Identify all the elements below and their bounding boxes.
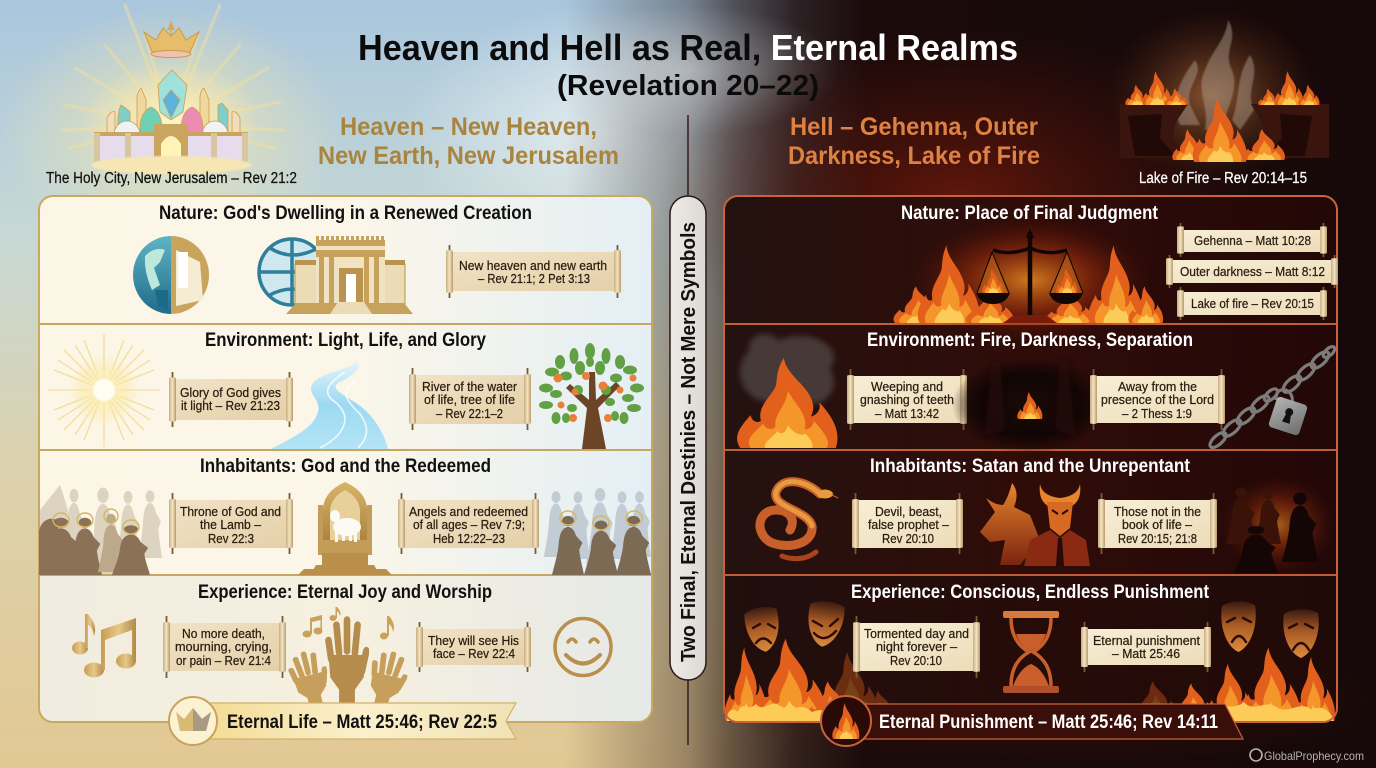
icon: scales and flames [894, 218, 1163, 342]
center pill [670, 196, 706, 680]
icon: unrepentant silhouettes [1220, 476, 1336, 574]
title [358, 27, 1018, 102]
icon: hourglass [1003, 611, 1059, 693]
heading: heaven [318, 113, 619, 170]
icon: globe and door [133, 236, 209, 314]
heading: experience: Experience: Conscious, Endless Punishment [851, 581, 1209, 603]
scroll: outer darkness [1166, 255, 1338, 288]
icon: serpent [760, 482, 838, 559]
scroll: river of the water: River of the water [422, 379, 518, 394]
icon: sun of glory [48, 334, 160, 447]
scroll: angels [398, 493, 539, 554]
heading: experience: Experience: Eternal Joy and Worship [198, 581, 492, 603]
watermark: GlobalProphecy.com [1264, 749, 1364, 763]
scroll: angels: of all ages – Rev 7:9; [413, 517, 525, 532]
subtitle: (Revelation 20–22) [557, 70, 819, 102]
scroll: river of the water: – Rev 22:1–2 [436, 406, 503, 421]
scroll: eternal punishment: Eternal punishment [1093, 633, 1200, 648]
heading: heaven: New Earth, New Jerusalem [318, 142, 619, 170]
panel: hell [724, 196, 1338, 722]
scroll: devil beast [852, 493, 963, 554]
scroll: gehenna [1177, 223, 1327, 257]
scroll: away [1090, 369, 1225, 430]
heading: inhabitants: Inhabitants: God and the Redeemed [200, 455, 491, 477]
scroll: weeping: gnashing of teeth [860, 392, 954, 407]
scroll: angels: Angels and redeemed [409, 504, 528, 519]
icon: broken chain and padlock [1208, 345, 1337, 450]
icon: flame medallion [821, 696, 871, 746]
icon: dark cave with fire [952, 357, 1108, 453]
scroll: those not in the book: Rev 20:15; 21:8 [1118, 531, 1197, 546]
panel: heaven [39, 196, 652, 722]
caption: lake of fire: Lake of Fire – Rev 20:14–15 [1139, 170, 1307, 187]
scroll: away: presence of the Lord [1101, 392, 1214, 407]
heading: hell: Hell – Gehenna, Outer [790, 113, 1038, 141]
scroll: new heaven: New heaven and new earth [459, 258, 607, 273]
scroll: away: – 2 Thess 1:9 [1122, 406, 1192, 421]
scroll: away: Away from the [1118, 379, 1197, 394]
banner: eternal life [169, 697, 516, 745]
scroll: weeping [847, 369, 967, 430]
scroll: those not in the book: book of life – [1122, 517, 1193, 532]
icon: throne and lamb [298, 482, 392, 575]
center pill: Two Final, Eternal Destinies – Not Mere Symbols [677, 222, 700, 662]
scroll: no more death: mourning, crying, [175, 639, 272, 654]
scroll: eternal punishment: – Matt 25:46 [1112, 646, 1180, 661]
scroll: weeping: – Matt 13:42 [875, 406, 939, 421]
title: Heaven and Hell as Real, Eternal Realms [358, 27, 1018, 68]
scroll: no more death [163, 616, 286, 678]
scroll: river of the water: of life, tree of life [424, 392, 515, 407]
scroll: they will see his face [416, 622, 531, 672]
scroll: lake of fire: Lake of fire – Rev 20:15 [1191, 296, 1314, 311]
scroll: glory of god: Glory of God gives [180, 385, 281, 400]
icon: globe and temple [259, 238, 413, 314]
heading: environment: Environment: Fire, Darkness, Separation [867, 329, 1193, 351]
icon: beast and false prophet [980, 483, 1090, 566]
scroll: no more death: or pain – Rev 21:4 [176, 653, 271, 668]
scroll: throne: the Lamb – [200, 517, 262, 532]
icon: horned figure [1024, 484, 1090, 566]
heading: heaven: Heaven – New Heaven, [340, 113, 597, 141]
banner: eternal punishment: Eternal Punishment – Matt 25:46; Rev 14:11 [879, 712, 1218, 733]
icon: raised hands [288, 607, 410, 712]
icon: lake of fire [1107, 10, 1329, 180]
scroll: throne: Throne of God and [180, 504, 281, 519]
scroll: those not in the book [1098, 493, 1217, 554]
icon: crown [144, 21, 199, 58]
banner: eternal life: Eternal Life – Matt 25:46; Rev 22:5 [227, 712, 497, 733]
icon: river of life [271, 361, 388, 449]
icon: golden rays [62, 5, 285, 155]
banner: eternal punishment [821, 696, 1243, 746]
icon: lamb [330, 510, 361, 542]
icon: holy city New Jerusalem [62, 5, 285, 182]
heading: hell [788, 113, 1040, 170]
scroll: glory of god [169, 372, 293, 427]
scroll: eternal punishment [1081, 622, 1211, 672]
scroll: new heaven [446, 245, 621, 298]
icon: worshippers left [39, 485, 162, 575]
scroll: devil beast: Rev 20:10 [882, 531, 934, 546]
icon: smiley face [555, 618, 611, 676]
heading: nature: Nature: Place of Final Judgment [901, 202, 1158, 224]
scroll: gehenna: Gehenna – Matt 10:28 [1194, 233, 1311, 248]
scroll: glory of god: it light – Rev 21:23 [181, 398, 280, 413]
scroll: new heaven: – Rev 21:1; 2 Pet 3:13 [478, 271, 590, 286]
icon: masks right [1221, 601, 1319, 658]
scroll: tormented [853, 616, 980, 678]
heading: environment: Environment: Light, Life, and Glory [205, 329, 486, 351]
scroll: tormented: night forever – [876, 639, 958, 654]
scroll: throne [169, 493, 293, 554]
icon: masks left [743, 599, 846, 654]
scroll: they will see his face: face – Rev 22:4 [433, 646, 515, 661]
icon: music notes [72, 614, 136, 678]
heading: nature: Nature: God's Dwelling in a Renewed Creation [159, 202, 532, 224]
flames: experience row background [724, 639, 1335, 721]
icon: tree of life [539, 343, 644, 449]
scroll: outer darkness: Outer darkness – Matt 8:12 [1180, 264, 1325, 279]
scroll: angels: Heb 12:22–23 [433, 531, 505, 546]
scroll: weeping: Weeping and [871, 379, 943, 394]
scroll: river of the water [409, 368, 531, 430]
scroll: tormented: Rev 20:10 [890, 653, 942, 668]
icon: worshippers right [544, 488, 651, 575]
scroll: those not in the book: Those not in the [1114, 504, 1201, 519]
scroll: no more death: No more death, [182, 626, 265, 641]
icon: bull [980, 483, 1040, 565]
scroll: lake of fire [1177, 287, 1327, 320]
scroll: they will see his face: They will see His [428, 633, 519, 648]
scroll: throne: Rev 22:3 [208, 531, 254, 546]
heading: inhabitants: Inhabitants: Satan and the Unrepentant [870, 455, 1190, 477]
center divider line [687, 115, 689, 745]
icon: fire and smoke [737, 334, 838, 448]
icon: crown medallion [169, 697, 217, 745]
scroll: devil beast: Devil, beast, [875, 504, 942, 519]
caption: holy city: The Holy City, New Jerusalem – Rev 21:2 [46, 170, 297, 187]
scroll: devil beast: false prophet – [868, 517, 950, 532]
icon: smoke [1176, 20, 1254, 130]
scroll: tormented: Tormented day and [864, 626, 969, 641]
heading: hell: Darkness, Lake of Fire [788, 142, 1040, 170]
